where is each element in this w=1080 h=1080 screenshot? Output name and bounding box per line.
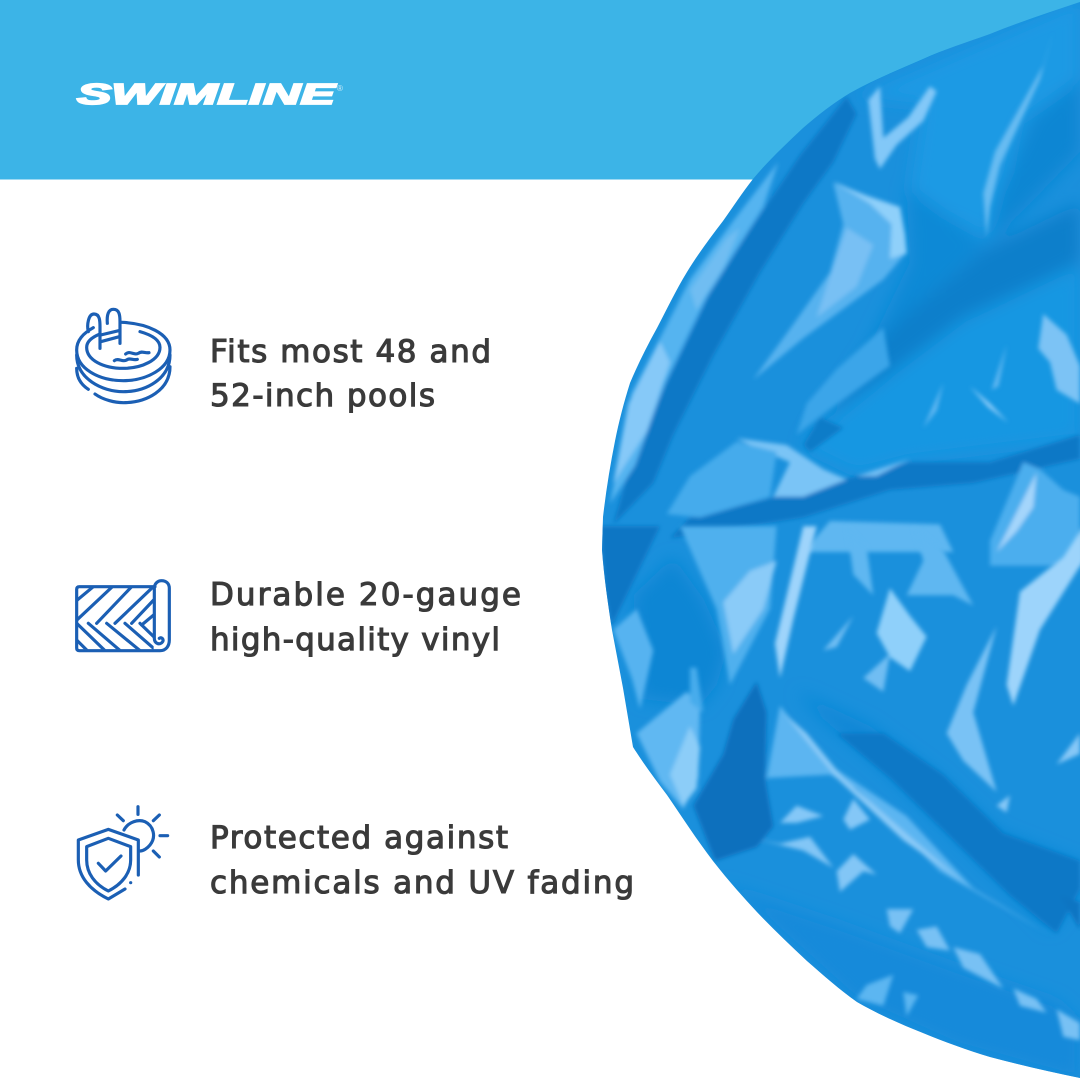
dark fold along rim: [613, 97, 857, 524]
feature 3: [78, 807, 634, 901]
product photo: blue vinyl pool liner: [590, 0, 1080, 1080]
logo: Swimline: SWIMLINE: [77, 79, 338, 111]
icon: vinyl roll with herringbone pattern: [73, 581, 169, 653]
feature 2: [73, 577, 521, 658]
icon: shield with check and sun: [78, 807, 168, 899]
photo shading: upper half: [610, 0, 1080, 566]
feature 1: [77, 309, 491, 414]
text: protection: chemicals and UV fading: [210, 865, 634, 901]
icon: above-ground pool with ladder: [77, 309, 170, 403]
highlights: [610, 162, 778, 504]
photo shading: lower half: [600, 526, 1080, 1080]
text: vinyl: [210, 577, 521, 658]
logo: Swimline: [77, 79, 343, 111]
text: protection: [210, 820, 634, 901]
text: vinyl: Durable 20-gauge: [210, 577, 521, 613]
text: pool size: [210, 334, 491, 414]
header band: [0, 0, 1080, 180]
text: pool size: 52-inch pools: [210, 378, 435, 414]
text: pool size: Fits most 48 and: [210, 334, 491, 370]
text: vinyl: high-quality vinyl: [210, 622, 500, 658]
logo: Swimline: ®: [337, 84, 343, 93]
text: protection: Protected against: [210, 820, 508, 856]
highlights: [680, 526, 777, 685]
